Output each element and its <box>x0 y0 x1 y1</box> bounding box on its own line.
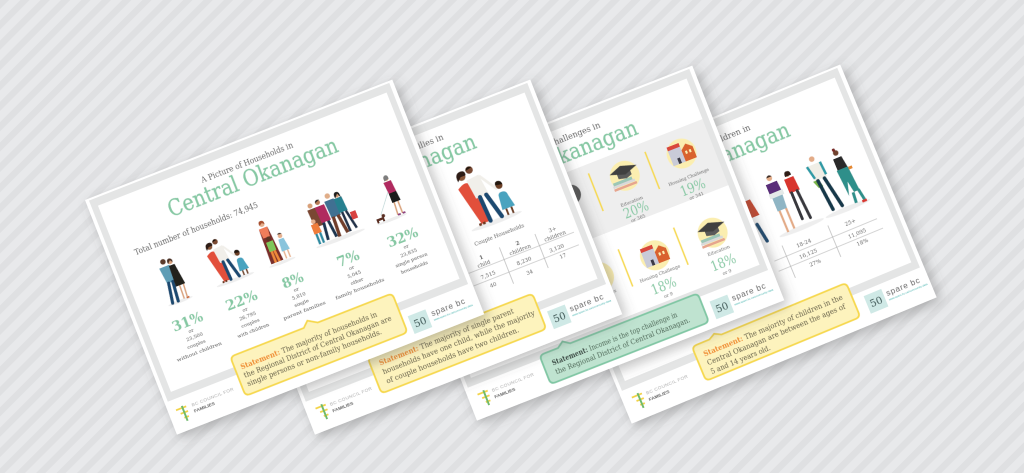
table: couple households: 3,120 <box>549 243 566 255</box>
callout: statement: single persons or non-family households. <box>246 328 383 388</box>
text: 31 percent: couples <box>186 338 207 351</box>
icon: housing, bottom <box>635 236 674 275</box>
text: 8 percent: single <box>294 298 310 309</box>
text: 32 percent <box>384 224 432 277</box>
footer: SPARC BC logo: spare bc <box>568 292 605 314</box>
text: 22 percent: with children <box>237 322 271 340</box>
footer: BC Council logo: BC COUNCIL FOR <box>491 372 535 394</box>
icon: hidden dark icon <box>558 182 584 208</box>
callout: statement: the Regional District of Central Okanagan are <box>243 315 393 380</box>
callout: statement: Statement: Income is the top challenge in <box>551 310 679 367</box>
footer: BC Council logo: FAMILIES <box>648 389 671 403</box>
callout: statement: Statement: The majority of households in <box>239 310 379 371</box>
heading: title: Central Okanagan <box>617 118 794 210</box>
text: 32 percent: households <box>400 260 429 276</box>
table: age groups: 25+ <box>844 218 857 228</box>
panel: card 1, households <box>85 80 484 435</box>
text: 31 percent: 31% <box>170 309 206 336</box>
illustration: woman walking dog <box>361 173 408 226</box>
footer: BC Council logo <box>631 373 693 411</box>
callout: statement <box>691 280 860 381</box>
callout: statement <box>368 294 546 393</box>
footer: BC Council logo: BC COUNCIL FOR <box>329 386 373 408</box>
text: 7 percent: family households <box>335 277 386 302</box>
text: housing stat, bottom: or 9 <box>663 291 674 300</box>
footer: SPARC BC logo: spare bc <box>730 281 767 303</box>
footer: SPARC BC logo: spare bc <box>885 276 922 298</box>
callout: statement <box>228 288 408 396</box>
footer: SPARC BC logo: 50 <box>869 295 885 310</box>
text: 8 percent: 5,810 <box>291 291 307 302</box>
text: housing stat: Housing Challenge <box>668 167 710 188</box>
heading: title: Central Okanagan <box>164 133 342 223</box>
text: 32 percent: or <box>403 243 410 251</box>
table: couple households: 2 <box>515 240 521 247</box>
text: 32 percent: 32% <box>385 225 421 251</box>
footer: SPARC BC logo <box>547 288 614 329</box>
footer: SPARC BC logo: www.sparc.bc.ca/community-data <box>572 298 612 317</box>
text: couple households heading: Couple Households <box>474 223 525 248</box>
icon: housing, top <box>662 134 701 173</box>
callout: statement: households have one child, while the majority <box>382 309 536 376</box>
text: 31 percent: or <box>188 327 195 335</box>
table: age groups: 18-24 <box>796 238 813 250</box>
table: couple households: 40 <box>489 281 498 290</box>
footer: BC Council logo: BC COUNCIL FOR <box>191 386 235 408</box>
illustration: single parent family <box>252 214 296 269</box>
heading: subtitle: A Picture of Children in <box>659 123 752 169</box>
text: education stat, bottom: 18% <box>709 251 739 275</box>
callout: statement: the Regional District of Central Okanagan. <box>554 316 691 376</box>
panel: card 3, challenges <box>385 66 784 421</box>
text: housing stat, bottom: Housing Challenge <box>639 263 682 285</box>
heading: title: Central Okanagan <box>302 130 480 219</box>
footer: SPARC BC logo <box>710 278 776 319</box>
text: total households: Total number of households: 74,945 <box>133 201 259 257</box>
footer: SPARC BC logo: 50 <box>714 301 730 316</box>
text: 22 percent <box>223 287 271 340</box>
text: partial label: Savings <box>598 288 618 300</box>
table: age groups: 11,095 <box>848 228 868 241</box>
text: 31 percent: 23,500 <box>185 331 204 343</box>
callout: statement: 5 and 14 years old. <box>710 344 772 376</box>
callout: statement: Statement: The majority of children in the <box>702 293 844 358</box>
text: 22 percent: couples <box>240 317 261 330</box>
text: 8 percent: or <box>293 286 301 294</box>
text: housing stat, bottom <box>639 263 690 306</box>
footer: BC Council logo <box>175 386 239 423</box>
table: age groups <box>770 206 888 283</box>
heading: subtitle: A Picture of Families in <box>352 133 445 176</box>
text: 7 percent: or <box>348 264 356 272</box>
icon: education, bottom <box>693 213 732 252</box>
illustration: couple with child <box>449 154 523 233</box>
heading: subtitle: A Picture of Challenges in <box>499 121 602 168</box>
footer: SPARC BC logo <box>408 293 475 334</box>
callout: statement: of couple households have two children. <box>385 326 520 386</box>
text: housing stat <box>668 167 718 207</box>
table: couple households: 1 <box>479 255 485 262</box>
text: 8 percent: 8% <box>280 270 306 293</box>
footer: SPARC BC logo: 50 <box>413 316 428 330</box>
text: 31 percent: without children <box>176 340 224 364</box>
text: education stat, bottom: or 9 <box>722 268 733 277</box>
table: couple households: 3+ <box>548 226 558 235</box>
table: age groups: 27% <box>809 259 822 269</box>
text: 32 percent: single person <box>395 251 429 270</box>
table: couple households <box>464 220 583 298</box>
icon: hidden circle, bottom <box>580 258 618 297</box>
callout: statement <box>538 289 709 384</box>
callout: statement: Central Okanagan are between the ages of <box>706 302 848 367</box>
panel: card 2, families <box>223 80 622 435</box>
callout: statement: Statement: The majority of single parent <box>378 306 515 367</box>
footer: BC Council logo: FAMILIES <box>494 386 517 400</box>
heading: subtitle: A Picture of Households in <box>199 141 294 185</box>
footer: BC Council logo <box>315 385 377 422</box>
text: housing stat: or 341 <box>689 191 705 202</box>
footer: SPARC BC logo <box>864 272 930 314</box>
illustration: other family households <box>299 185 366 250</box>
icon: education, top <box>605 156 644 195</box>
footer: SPARC BC logo: www.sparc.bc.ca/community-data <box>734 287 774 307</box>
text: education stat, bottom: Education <box>707 244 731 258</box>
table: couple households: children <box>544 230 567 244</box>
table: couple households: 8,230 <box>516 256 533 267</box>
table: couple households: 34 <box>526 269 535 277</box>
footer: SPARC BC logo: www.sparc.bc.ca/community-data <box>888 282 929 302</box>
text: 8 percent: parent families <box>283 300 327 322</box>
footer: SPARC BC logo: 50 <box>552 311 568 326</box>
dividers <box>588 151 689 287</box>
illustration: couple without children <box>152 254 193 307</box>
band: grey row <box>414 119 728 298</box>
table: couple households: 7,515 <box>480 270 497 281</box>
text: 31 percent <box>162 306 224 364</box>
panel: card 4, children <box>535 65 937 424</box>
table: age groups: 16,125 <box>799 248 819 261</box>
text: 22 percent: 22% <box>223 288 260 315</box>
table: couple households: child <box>477 259 492 270</box>
table: age groups: 18% <box>856 238 869 248</box>
text: 7 percent: 5,045 <box>347 269 362 280</box>
text: education stat: or 365 <box>630 213 647 224</box>
text: 32 percent: 23,835 <box>400 248 418 260</box>
heading: title: Central Okanagan <box>464 116 642 205</box>
text: 22 percent: 26,795 <box>239 311 257 323</box>
text: 7 percent: 7% <box>335 248 362 271</box>
text: housing stat: 19% <box>678 176 708 200</box>
text: 8 percent <box>269 265 327 322</box>
footer: BC Council logo: BC COUNCIL FOR <box>645 374 689 396</box>
text: education stat: Education <box>620 195 644 209</box>
footer: SPARC BC logo: www.sparc.bc.ca/community-data <box>433 303 474 322</box>
footer: BC Council logo <box>477 371 539 408</box>
illustration: couple with children <box>200 230 255 289</box>
text: 22 percent: or <box>242 306 249 314</box>
footer: BC Council logo: FAMILIES <box>332 400 355 414</box>
text: housing stat, bottom: 18% <box>649 274 679 299</box>
text: 7 percent: other <box>350 276 365 287</box>
text: education stat, bottom <box>706 244 740 280</box>
text: education stat: 20% <box>621 198 651 223</box>
footer: SPARC BC logo: spare bc <box>430 297 467 318</box>
illustration: group of young people <box>734 142 871 248</box>
table: couple households: 17 <box>559 253 568 261</box>
table: couple households: children <box>509 243 533 257</box>
footer: BC Council logo: FAMILIES <box>193 401 217 415</box>
text: 7 percent <box>321 242 386 302</box>
